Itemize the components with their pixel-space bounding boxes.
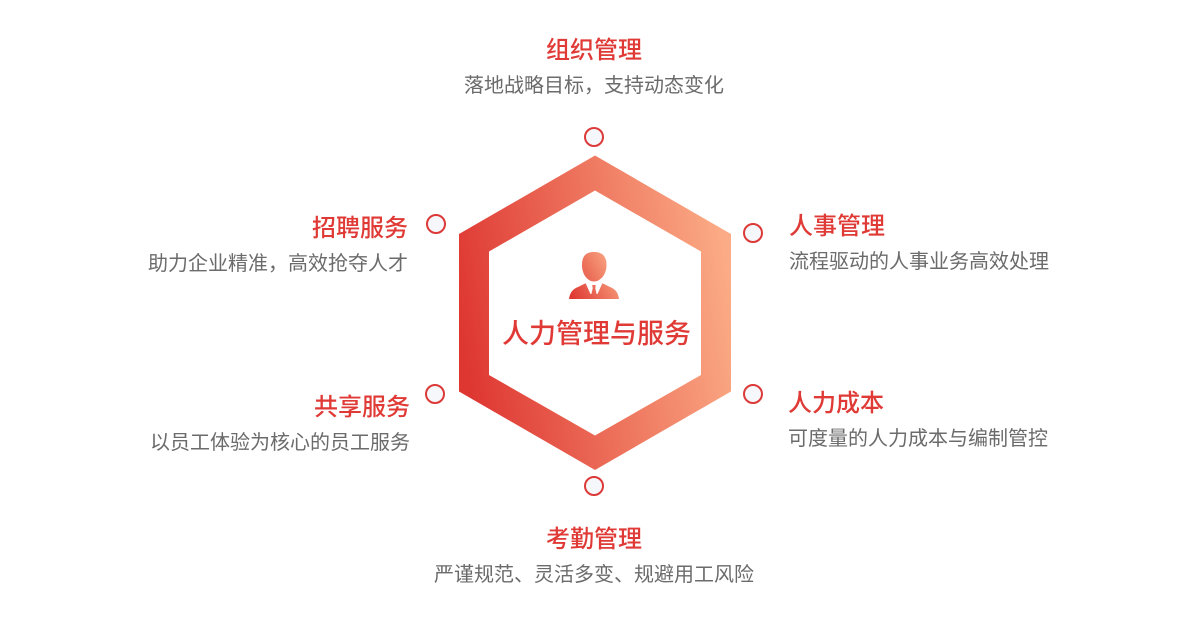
icon: businessman (569, 252, 619, 299)
marker: top (585, 128, 603, 146)
text block: shared services: 共享服务 (314, 394, 410, 421)
text block: shared services (150, 394, 410, 454)
text block: organization management: 组织管理 (546, 37, 642, 64)
text block: attendance management: 严谨规范、灵活多变、规避用工风险 (434, 564, 754, 586)
text block: personnel management: 人事管理 (789, 213, 885, 240)
marker: bottom (585, 477, 603, 495)
marker: lower left (426, 385, 444, 403)
center title: 人力管理与服务 (502, 319, 691, 349)
text block: labor cost: 人力成本 (788, 390, 884, 417)
marker: upper left (427, 215, 445, 233)
marker: lower right (744, 385, 762, 403)
text block: recruitment services (148, 215, 408, 275)
text block: shared services: 以员工体验为核心的员工服务 (150, 432, 410, 454)
text block: personnel management (789, 213, 1049, 273)
marker: upper right (744, 224, 762, 242)
text block: attendance management: 考勤管理 (546, 526, 642, 553)
text block: labor cost (788, 390, 1048, 450)
text block: organization management: 落地战略目标，支持动态变化 (464, 75, 724, 97)
text block: recruitment services: 招聘服务 (312, 215, 408, 242)
text block: organization management (464, 37, 724, 97)
hexagon ring (459, 156, 731, 470)
text block: personnel management: 流程驱动的人事业务高效处理 (789, 251, 1049, 273)
text block: labor cost: 可度量的人力成本与编制管控 (788, 428, 1048, 450)
text block: attendance management (434, 526, 754, 586)
text block: recruitment services: 助力企业精准，高效抢夺人才 (148, 253, 408, 275)
